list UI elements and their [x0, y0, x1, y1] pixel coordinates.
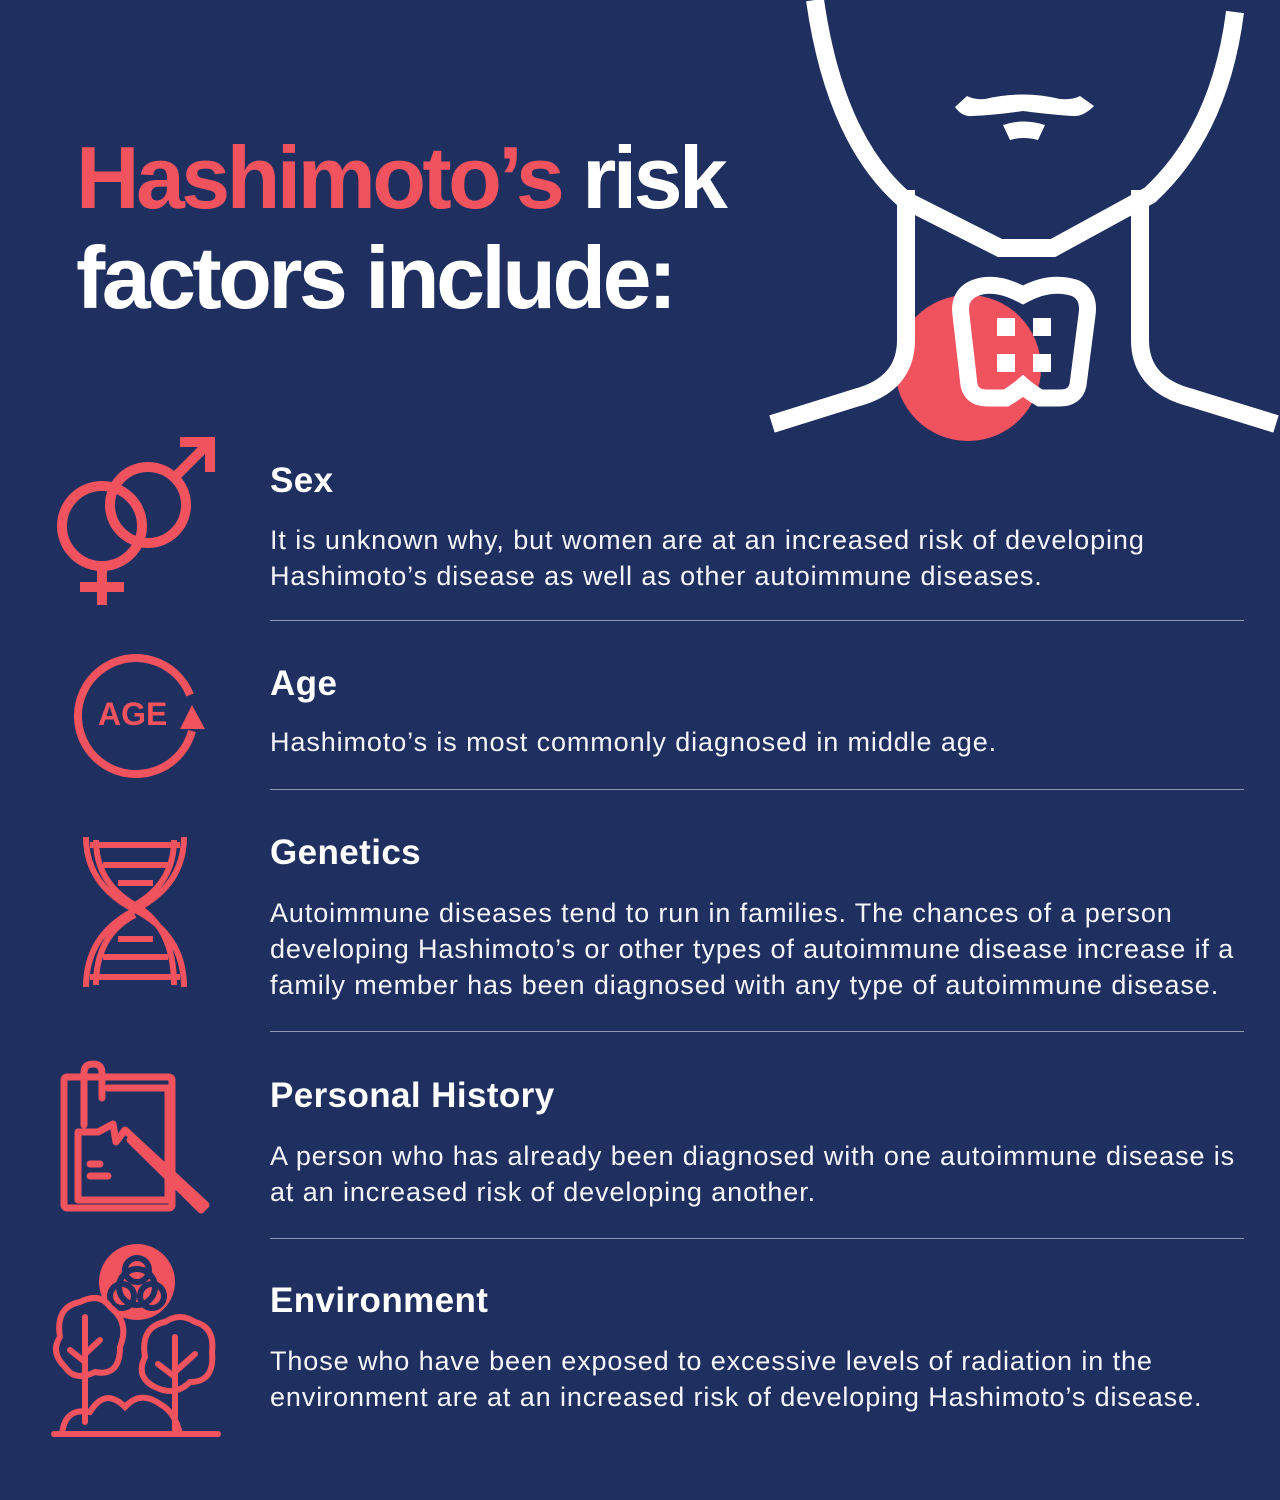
icon: environment — [51, 1244, 221, 1437]
text: genetics: Autoimmune diseases tend to run in families. The chances of a person — [270, 898, 1173, 928]
text: environment: environment are at an increased risk of developing Hashimoto’s disease. — [270, 1382, 1202, 1412]
heading: genetics: Genetics — [270, 833, 421, 872]
heading: sex: Sex — [270, 461, 333, 500]
text: environment — [270, 1346, 1202, 1412]
heading: environment: Environment — [270, 1281, 488, 1320]
text: personal history: A person who has already been diagnosed with one autoimmune disease is — [270, 1141, 1235, 1171]
title — [76, 128, 728, 327]
icon: sex symbols — [57, 437, 215, 605]
illustration: neck and thyroid — [769, 0, 1279, 441]
text: sex: It is unknown why, but women are at an increased risk of developing — [270, 525, 1145, 555]
text: environment: Those who have been exposed to excessive levels of radiation in the — [270, 1346, 1153, 1376]
icon: dna — [83, 837, 187, 987]
text: sex — [270, 525, 1145, 591]
heading: personal history: Personal History — [270, 1076, 555, 1115]
text: personal history — [270, 1141, 1235, 1207]
text: genetics — [270, 898, 1234, 1000]
text: genetics: family member has been diagnosed with any type of autoimmune disease. — [270, 970, 1219, 1000]
icon: age — [74, 654, 205, 778]
title: factors include: — [76, 228, 674, 327]
icon: age: AGE — [98, 696, 167, 732]
text: age: Hashimoto’s is most commonly diagnosed in middle age. — [270, 727, 997, 757]
text: personal history: at an increased risk of developing another. — [270, 1177, 816, 1207]
icon: clipboard — [60, 1060, 210, 1214]
text: genetics: developing Hashimoto’s or other types of autoimmune disease increase if a — [270, 934, 1234, 964]
title: Hashimoto’s risk — [76, 128, 724, 227]
text: sex: Hashimoto’s disease as well as other autoimmune diseases. — [270, 561, 1043, 591]
heading: age: Age — [270, 664, 337, 703]
